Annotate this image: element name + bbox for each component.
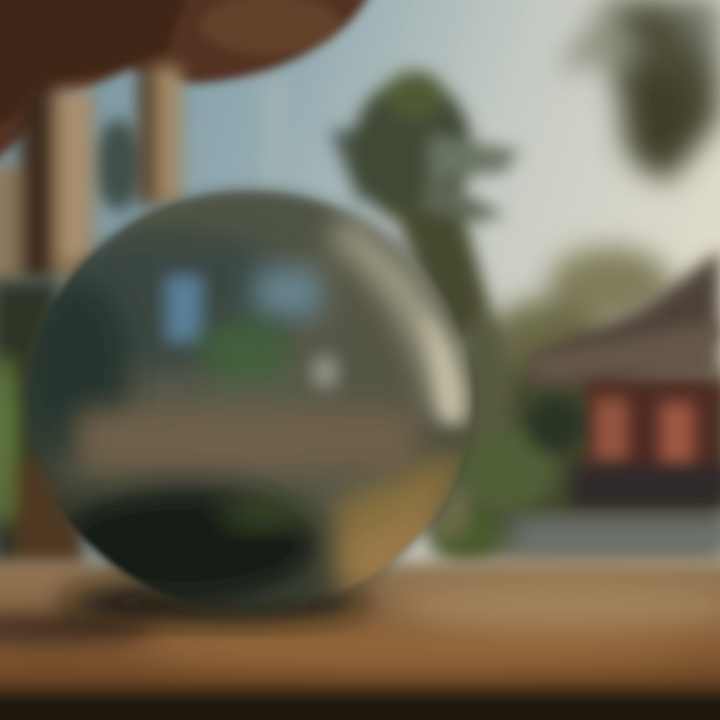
sphere reflections bbox=[20, 195, 472, 603]
reflection: blue sky right bbox=[255, 268, 321, 318]
reflection: tree canopy top bbox=[117, 190, 342, 236]
shrubs right of sphere bbox=[420, 395, 585, 559]
building: wall bbox=[585, 380, 720, 490]
pale column behind sphere bbox=[262, 80, 290, 200]
sandy ground bbox=[0, 562, 720, 720]
thatched roof top left bbox=[0, 0, 372, 165]
reflection: dark upper band bbox=[40, 230, 300, 370]
central palm tree bbox=[330, 71, 520, 470]
background greenery between columns bbox=[94, 119, 142, 211]
left edge foliage bbox=[0, 280, 84, 570]
wooden columns bbox=[0, 65, 182, 285]
building: red pillars bbox=[594, 398, 694, 470]
water or paving strip bbox=[510, 520, 720, 552]
sphere cast shadow bbox=[60, 582, 370, 622]
reflection: central green tree bbox=[199, 320, 291, 380]
ground light patches bbox=[0, 575, 720, 666]
reflection: golden lower right bbox=[330, 440, 465, 600]
building: base shadow bbox=[570, 465, 720, 510]
reflection: mid horizon band bbox=[75, 410, 415, 470]
top right palm fronds bbox=[555, 0, 720, 185]
distant foliage band bbox=[440, 247, 720, 560]
building: roof bbox=[530, 250, 720, 385]
reflection: dark lower hemisphere bbox=[50, 487, 320, 603]
reflection: blue sky left bbox=[165, 275, 203, 343]
building on the right bbox=[530, 250, 720, 510]
reflection: dark left side bbox=[20, 280, 130, 460]
building: eave bbox=[530, 320, 720, 382]
reflective sphere bbox=[20, 192, 472, 608]
reflection: bright right rim bbox=[330, 215, 472, 420]
foreground dark band bbox=[0, 695, 720, 720]
reflection: small highlight bbox=[311, 355, 339, 389]
